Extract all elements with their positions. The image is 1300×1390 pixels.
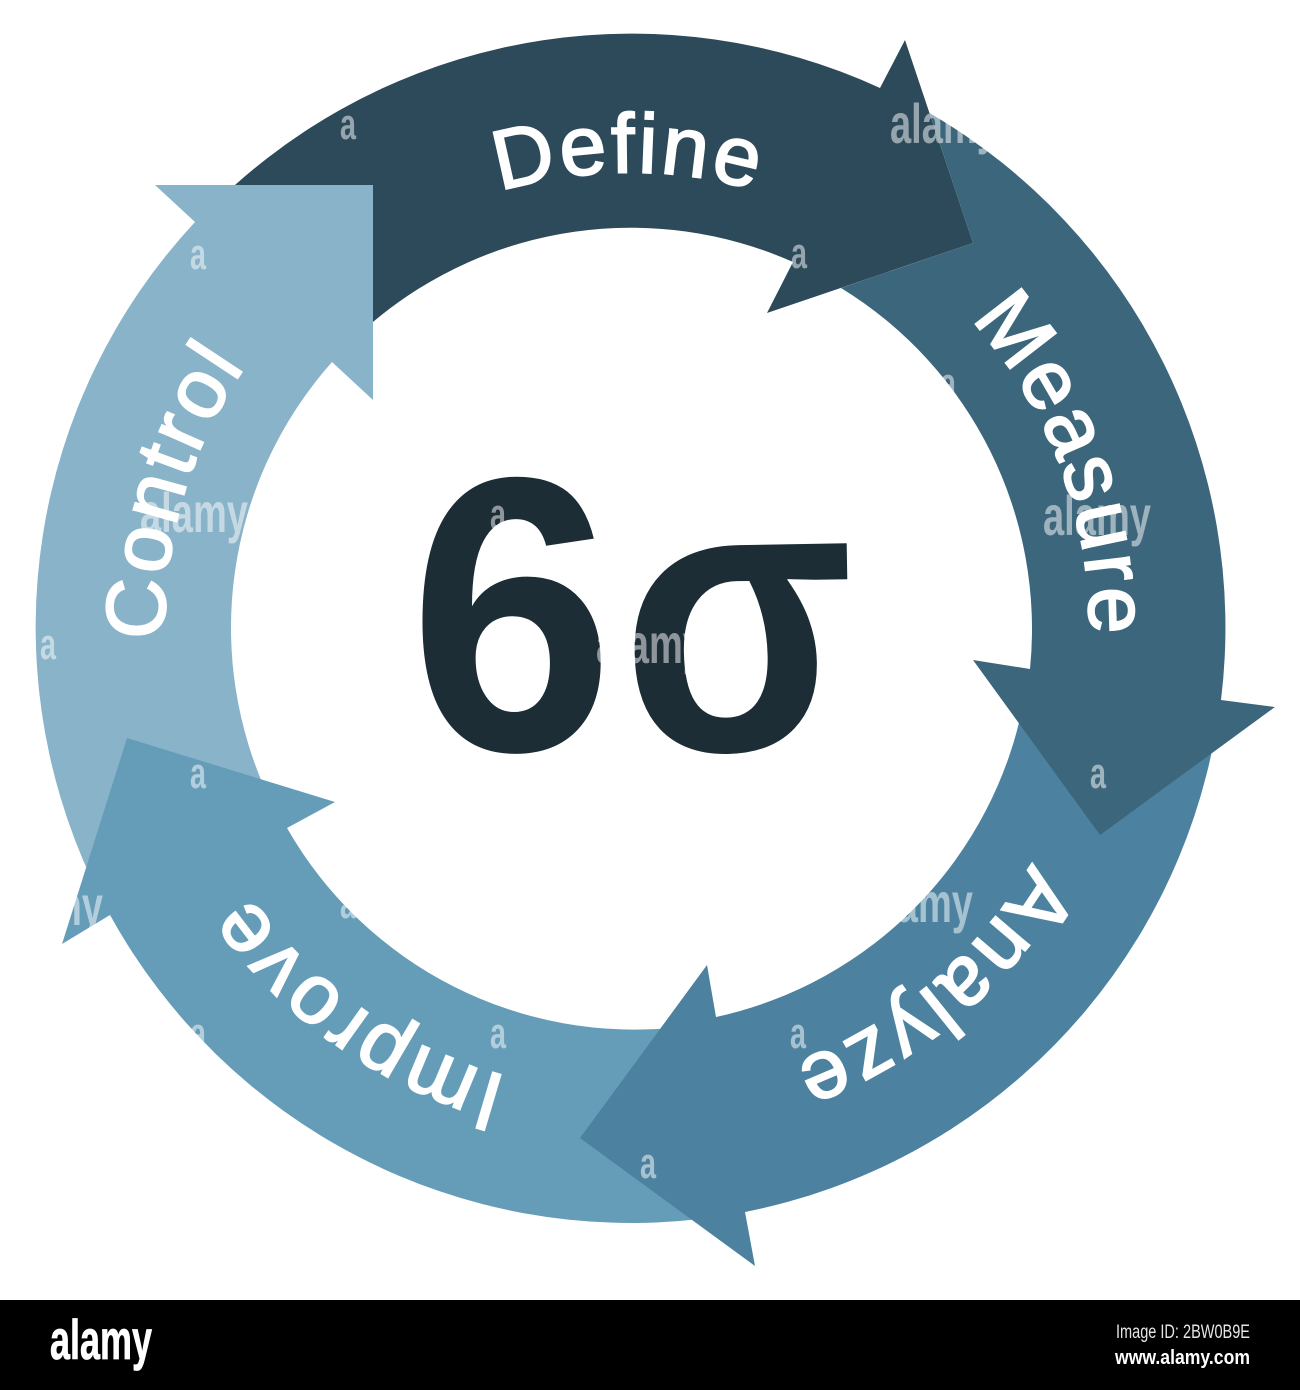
arrow: Measure bbox=[841, 113, 1275, 835]
label: Define: Define bbox=[492, 110, 758, 190]
watermarks: a bbox=[791, 229, 807, 278]
watermarks: alamy bbox=[890, 92, 998, 155]
arrow: Analyze bbox=[580, 700, 1216, 1266]
footer logo: alamy bbox=[50, 1308, 152, 1371]
center symbol: six sigma bbox=[409, 396, 858, 835]
watermarks: a bbox=[940, 359, 956, 408]
arrow: Control bbox=[36, 185, 373, 880]
watermarks: alamy bbox=[140, 481, 248, 544]
watermarks: alamy bbox=[1043, 484, 1151, 547]
watermarks: a bbox=[340, 879, 356, 928]
website: www.alamy.com bbox=[1114, 1347, 1250, 1369]
label: Improve: Improve bbox=[222, 904, 502, 1132]
watermarks: a bbox=[190, 230, 206, 279]
watermarks: a bbox=[190, 749, 206, 798]
watermarks: a bbox=[1090, 749, 1106, 798]
watermarks: a bbox=[490, 490, 506, 539]
watermarks: a bbox=[190, 1009, 206, 1058]
arrow: Define bbox=[235, 34, 973, 322]
watermarks: a bbox=[340, 100, 356, 149]
watermarks: a bbox=[790, 1009, 806, 1058]
watermarks bbox=[0, 92, 1151, 1188]
arrow: Improve bbox=[62, 738, 700, 1223]
watermarks: alamy bbox=[865, 871, 973, 934]
image id: Image ID: 2BW0B9E bbox=[1116, 1322, 1250, 1343]
label: Measure: Measure bbox=[974, 287, 1136, 632]
watermarks: a bbox=[640, 1139, 656, 1188]
center symbol: six sigma: 6 bbox=[409, 396, 614, 833]
center symbol: six sigma: σ bbox=[617, 398, 858, 835]
footer bar bbox=[0, 1300, 1300, 1390]
label: Control: Control bbox=[105, 337, 243, 636]
watermarks: a bbox=[490, 1009, 506, 1058]
watermarks: alamy bbox=[596, 612, 704, 675]
watermarks: a bbox=[40, 620, 56, 669]
label: Analyze: Analyze bbox=[802, 862, 1068, 1099]
